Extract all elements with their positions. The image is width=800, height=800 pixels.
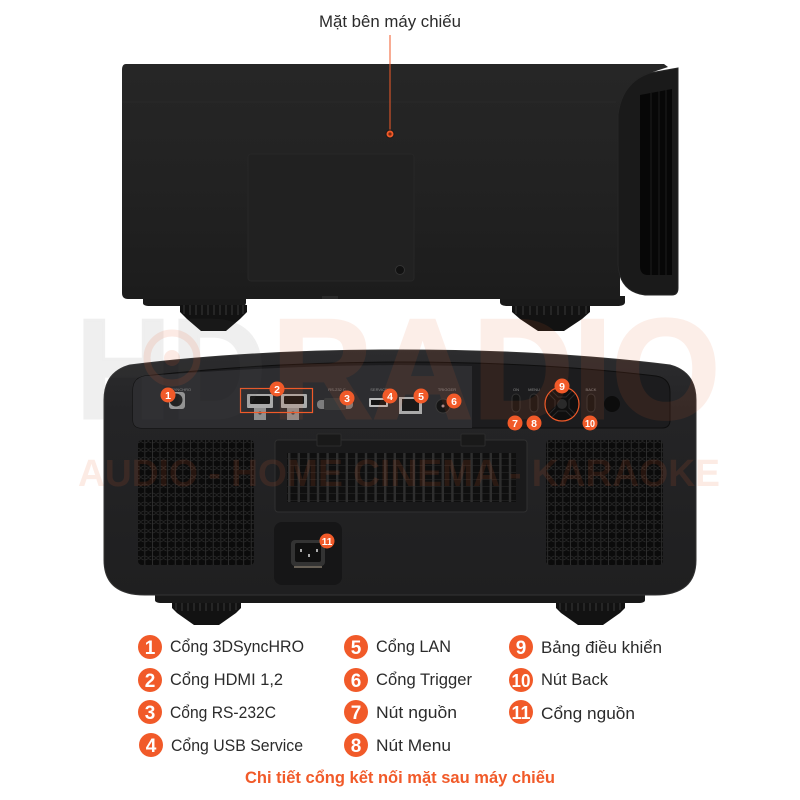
- port: LAN: [399, 397, 422, 414]
- legend item 11: Cổng nguồn: [541, 704, 635, 723]
- legend item 4: Cổng USB Service: [171, 736, 303, 755]
- marker 3: [340, 390, 354, 406]
- rear view feet: [172, 602, 625, 625]
- legend item 9: 9: [516, 638, 526, 659]
- legend item 8: 8: [351, 736, 361, 757]
- legend item 4: [139, 733, 303, 757]
- marker 7: [508, 416, 522, 430]
- side view access door: [248, 154, 414, 281]
- legend item 5: [344, 635, 451, 659]
- marker 1: [160, 388, 176, 402]
- IR sensor: [604, 396, 620, 412]
- marker 9: [554, 378, 570, 394]
- legend item 8: [344, 733, 451, 757]
- marker 6: 6: [451, 396, 457, 408]
- legend item 10: [509, 668, 608, 692]
- door screw: [396, 266, 404, 274]
- caption: Chi tiết cổng kết nối mặt sau máy chiếu: [245, 768, 555, 787]
- legend item 10: Nút Back: [541, 670, 608, 689]
- watermark: [76, 290, 720, 495]
- marker 11: [320, 534, 334, 548]
- legend item 11: [509, 700, 635, 724]
- projector rear view: [104, 350, 696, 625]
- legend item 1: 1: [145, 638, 156, 659]
- watermark: AUDIO - HOME CINEMA - KARAOKE: [78, 453, 720, 495]
- legend item 11: 11: [511, 703, 531, 723]
- port: RS-232C: RS-232 C: [328, 387, 346, 392]
- projector side view: [122, 35, 678, 331]
- centre filter panel: [275, 434, 527, 512]
- port: Trigger: [436, 387, 456, 413]
- marker 4: [382, 388, 398, 404]
- watermark: RADIO: [272, 290, 720, 449]
- rear view body: [155, 592, 645, 603]
- power inlet: [274, 522, 342, 585]
- legend item 7: [344, 700, 457, 724]
- power button: [512, 387, 520, 412]
- port: 3DSyncHRO: 3D SYNCHRO: [165, 387, 191, 392]
- legend item 7: Nút nguồn: [376, 703, 457, 722]
- marker 8: [526, 416, 542, 430]
- power button: ON: [513, 387, 519, 392]
- legend item 3: [138, 700, 276, 724]
- marker 5: [414, 388, 428, 404]
- menu button: [528, 387, 540, 412]
- legend item 2: Cổng HDMI 1,2: [170, 670, 283, 689]
- port: Trigger: TRIGGER: [438, 387, 456, 392]
- marker 7: 7: [512, 418, 518, 430]
- side view body: [122, 64, 668, 299]
- side view feet: [143, 296, 625, 331]
- legend item 1: [138, 635, 304, 659]
- legend item 8: Nút Menu: [376, 736, 451, 755]
- port: USB service: SERVICE: [370, 387, 388, 392]
- marker 4: 4: [387, 391, 393, 403]
- legend item 7: 7: [351, 703, 361, 724]
- legend item 3: 3: [145, 703, 155, 724]
- marker 1: 1: [165, 390, 171, 402]
- side callout marker: [386, 35, 394, 138]
- front bezel with vent: [618, 68, 678, 295]
- legend item 4: 4: [146, 736, 157, 757]
- legend item 10: 10: [512, 671, 530, 691]
- right vent: [546, 440, 663, 565]
- back button: [586, 387, 597, 412]
- marker 2: 2: [274, 384, 280, 396]
- legend item 6: [344, 668, 472, 692]
- port: USB service: [369, 387, 388, 407]
- control pad: [545, 387, 579, 421]
- marker 8: 8: [531, 418, 537, 430]
- legend item 2: 2: [145, 671, 155, 692]
- left vent: [138, 440, 254, 565]
- marker 10: [582, 416, 598, 430]
- legend item 2: [138, 668, 283, 692]
- legend item 9: [509, 635, 662, 659]
- marker 2: [270, 382, 284, 396]
- marker 11: 11: [322, 537, 333, 548]
- legend item 5: Cổng LAN: [376, 637, 451, 656]
- legend item 1: Cổng 3DSyncHRO: [170, 637, 304, 656]
- image callout numbers: [160, 378, 598, 548]
- marker 3: 3: [344, 393, 350, 405]
- port: RS-232C: [317, 387, 353, 410]
- legend item 3: Cổng RS-232C: [170, 703, 276, 722]
- legend item 5: 5: [351, 638, 362, 659]
- back button: BACK: [586, 387, 597, 392]
- marker 5: 5: [418, 391, 424, 403]
- menu button: MENU: [528, 387, 540, 392]
- marker 6: [446, 394, 462, 408]
- port: HDMI 1,2: [240, 388, 312, 420]
- heading: side view label: Mặt bên máy chiếu: [319, 12, 461, 31]
- watermark: HD: [76, 290, 266, 449]
- marker 10: 10: [585, 419, 595, 430]
- legend: [138, 635, 662, 757]
- port: 3DSyncHRO: [165, 387, 191, 409]
- legend item 9: Bảng điều khiển: [541, 638, 662, 657]
- legend item 6: 6: [351, 671, 361, 692]
- control and port panel: [133, 362, 670, 428]
- legend item 6: Cổng Trigger: [376, 670, 472, 689]
- marker 9: 9: [559, 381, 565, 393]
